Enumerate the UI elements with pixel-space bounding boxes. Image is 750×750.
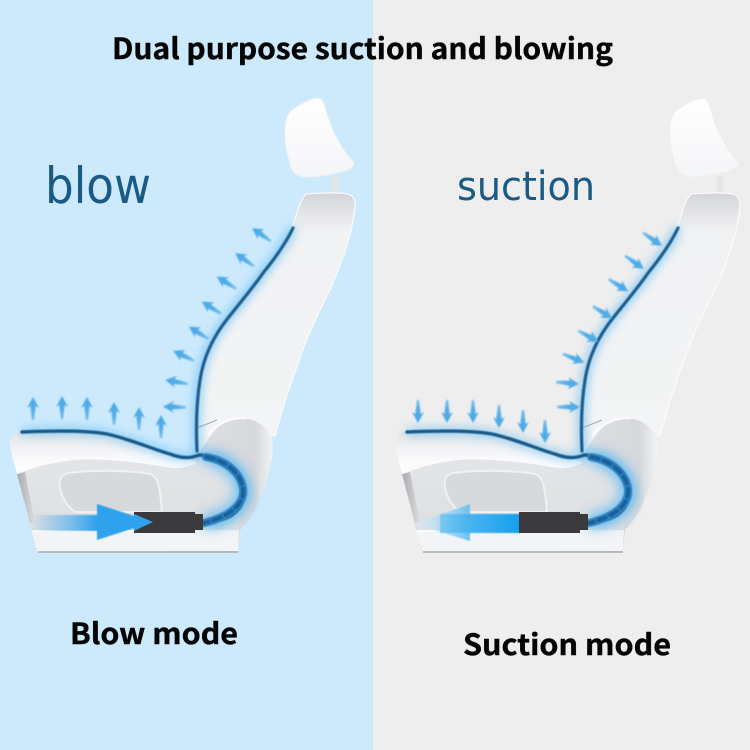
- seat shell: [395, 98, 740, 552]
- tube: backrest: [196, 228, 293, 451]
- heading: suction: suction: [457, 164, 595, 210]
- background: blow side: [0, 0, 373, 750]
- pump unit: [134, 512, 203, 533]
- arrows: air down into cushion: [412, 400, 551, 443]
- large blue arrow into pump: [33, 504, 153, 540]
- tube: seat and base: [407, 431, 630, 523]
- large blue arrow out of pump: [413, 504, 520, 541]
- wide glow around lower tube: [589, 457, 628, 523]
- air glow around tube: [22, 228, 293, 523]
- tube: seat and base: [22, 431, 245, 523]
- heading: blow: blow: [45, 157, 151, 215]
- panel: blow mode seat: [10, 98, 355, 552]
- arrows: air out of backrest: [163, 223, 274, 413]
- label: blow mode: Blow mode: [70, 611, 238, 653]
- panel: suction mode seat: [395, 98, 740, 552]
- title: Dual purpose suction and blowing: [112, 26, 613, 68]
- arrows: air up from cushion: [27, 396, 167, 438]
- tube: backrest: [581, 228, 678, 451]
- background: suction side: [373, 0, 750, 750]
- pump unit: [519, 512, 588, 533]
- arrows: air into backrest: [556, 228, 665, 413]
- seat shell: [10, 98, 355, 552]
- label: suction mode: Suction mode: [463, 622, 671, 664]
- arrow tip over pump: [134, 514, 153, 531]
- wide glow around lower tube: [204, 457, 243, 523]
- air glow around tube: [407, 228, 678, 523]
